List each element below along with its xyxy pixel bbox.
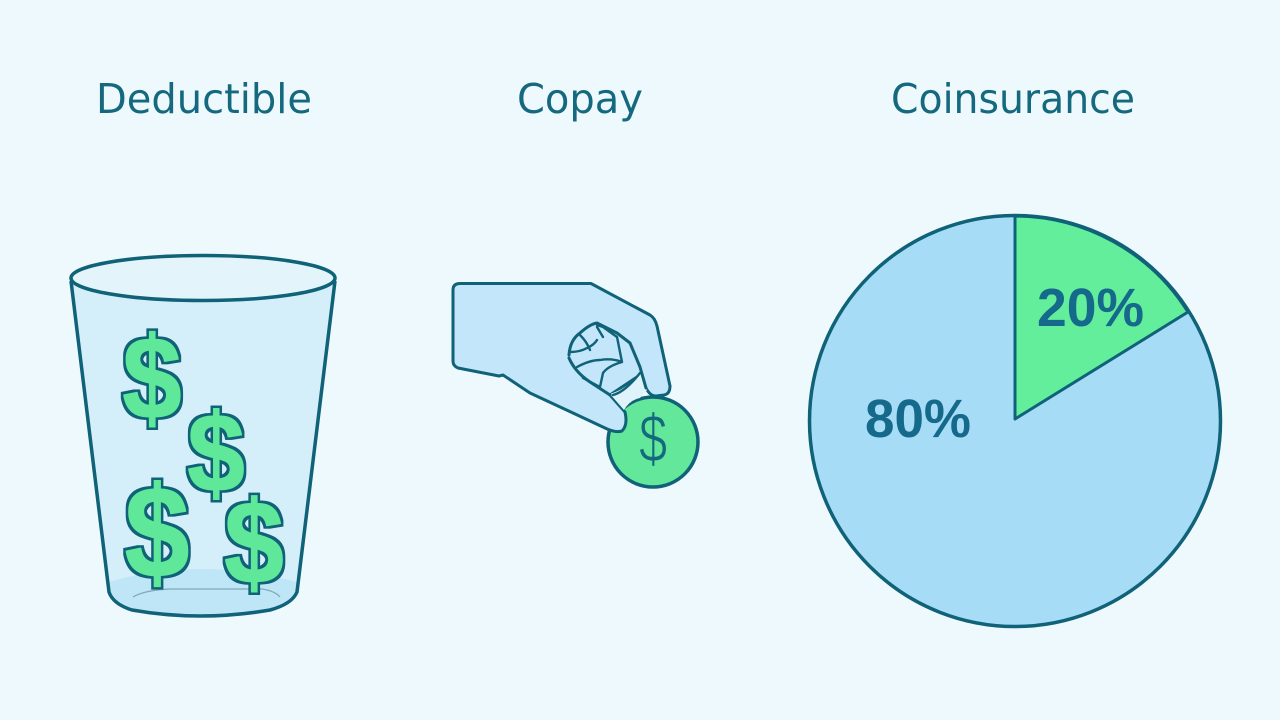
slice: 80 percent — [810, 216, 1220, 626]
water at the bottom of the glass — [108, 569, 297, 616]
hand — [453, 284, 670, 432]
dollar sign 1: $ — [122, 313, 182, 444]
pie chart: coinsurance split — [810, 216, 1220, 626]
label: 20%: 20% — [1037, 278, 1144, 338]
coin dollar sign: $ — [639, 401, 667, 477]
heading: Copay: Copay — [517, 75, 643, 123]
glass rim — [71, 256, 335, 300]
icon: glass of dollar signs — [71, 256, 335, 616]
glass body — [71, 281, 335, 616]
coin — [608, 397, 698, 487]
label: 80%: 80% — [865, 389, 971, 449]
icon: hand dropping coin — [453, 284, 698, 487]
heading: Deductible: Deductible — [96, 75, 312, 123]
heading: Coinsurance: Coinsurance — [891, 75, 1135, 123]
dollar sign 4: $ — [224, 476, 284, 608]
dollar sign 3: $ — [125, 460, 189, 605]
dollar sign 2: $ — [187, 390, 245, 515]
gap between fingers — [610, 373, 647, 410]
slice: 20 percent — [1015, 216, 1188, 419]
fingers curled inside the hand — [569, 323, 646, 395]
glass outline — [71, 281, 335, 616]
